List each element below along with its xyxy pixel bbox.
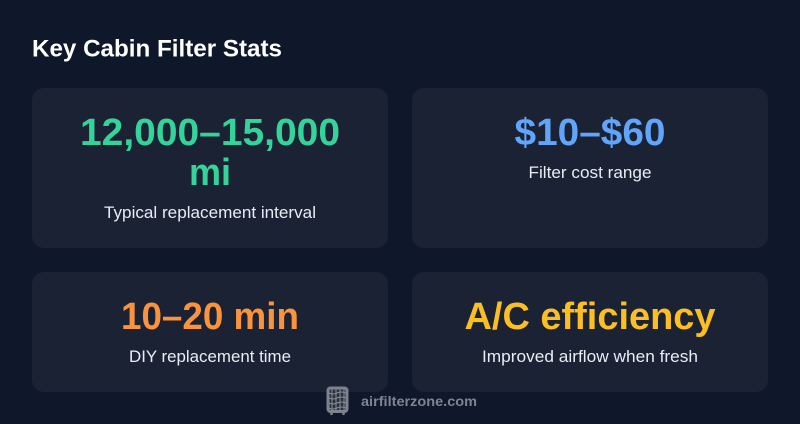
panel: replacement interval <box>32 88 388 248</box>
stat value: mileage: 12,000–15,000 <box>80 112 340 154</box>
panel: filter cost <box>412 88 768 248</box>
stat label: interval: Typical replacement interval <box>104 203 316 222</box>
stat value: mileage: mi <box>189 152 231 194</box>
stat value: mileage <box>80 112 340 194</box>
stat value: time: 10–20 min <box>121 296 299 338</box>
icon: air filter logo <box>328 388 347 415</box>
brand name: airfilterzone.com <box>361 393 477 409</box>
stat label: airflow: Improved airflow when fresh <box>482 347 698 366</box>
title: Key Cabin Filter Stats <box>32 36 282 62</box>
stat value: efficiency: A/C efficiency <box>464 296 716 338</box>
panel: DIY time <box>32 272 388 392</box>
stat value: cost: $10–$60 <box>514 112 666 154</box>
stat label: cost: Filter cost range <box>528 163 652 182</box>
stat label: time: DIY replacement time <box>129 347 291 366</box>
panel: A/C efficiency <box>412 272 768 392</box>
